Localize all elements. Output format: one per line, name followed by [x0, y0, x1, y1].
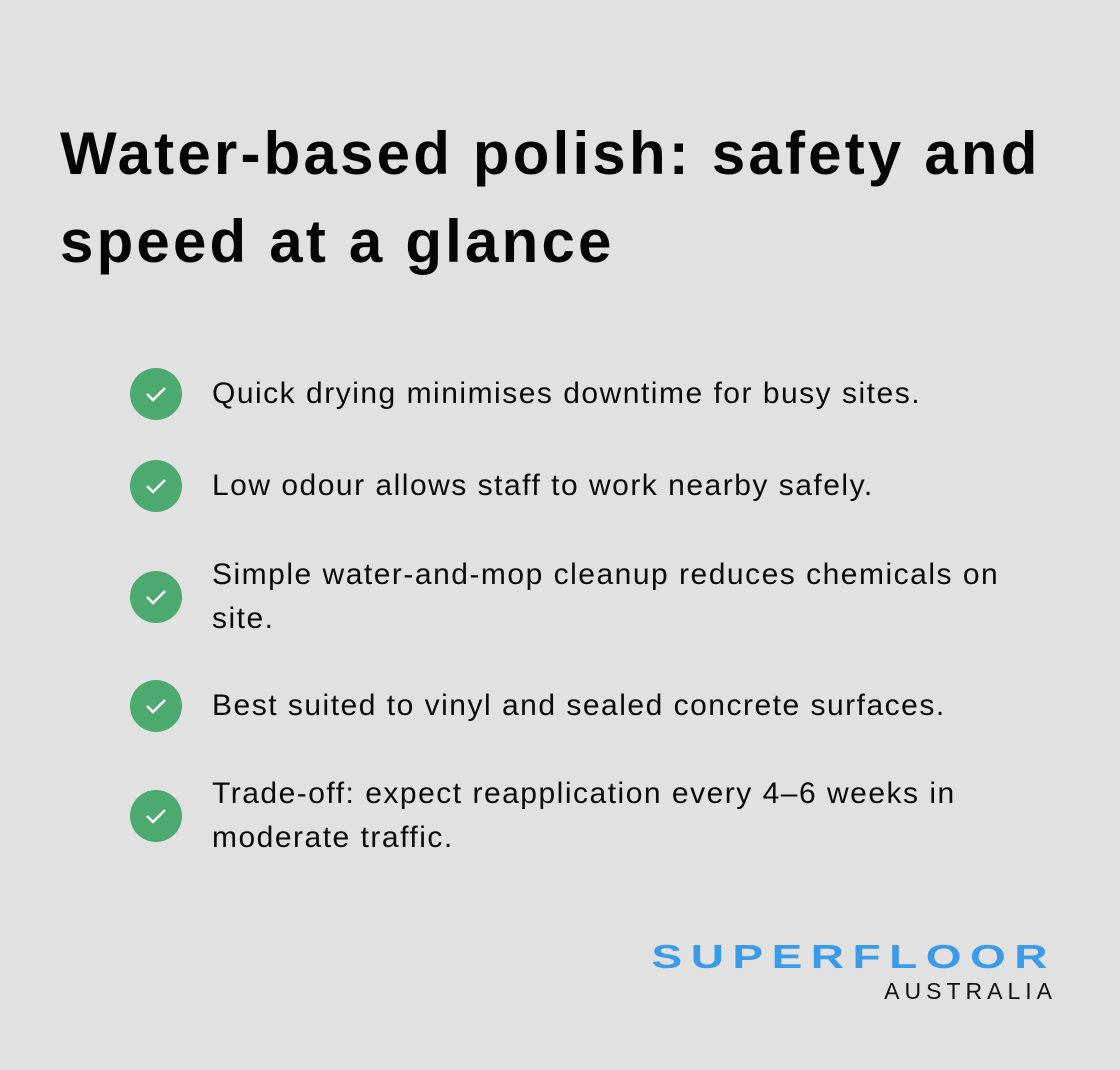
item 3: site.: [212, 602, 275, 635]
item 1: [130, 368, 921, 420]
icon: check: [130, 571, 182, 623]
icon: check: [130, 680, 182, 732]
logo: AUSTRALIA: [884, 978, 1057, 1004]
item 5: [130, 777, 956, 854]
logo: SUPERFLOOR: [652, 938, 1056, 975]
item 3: [130, 558, 999, 635]
title: speed at a glance: [60, 208, 615, 275]
item 4: [130, 680, 946, 732]
icon: check: [130, 790, 182, 842]
title: [60, 120, 1041, 275]
item 4: Best suited to vinyl and sealed concrete surfaces.: [212, 689, 946, 722]
item 2: Low odour allows staff to work nearby safely.: [212, 469, 874, 502]
item 5: moderate traffic.: [212, 821, 454, 854]
icon: check: [130, 368, 182, 420]
item 2: [130, 460, 874, 512]
logo: [652, 938, 1057, 1004]
item 1: Quick drying minimises downtime for busy sites.: [212, 377, 921, 410]
item 5: Trade-off: expect reapplication every 4–6 weeks in: [212, 777, 956, 810]
item 3: Simple water-and-mop cleanup reduces chemicals on: [212, 558, 999, 591]
icon: check: [130, 460, 182, 512]
title: Water-based polish: safety and: [60, 120, 1041, 187]
